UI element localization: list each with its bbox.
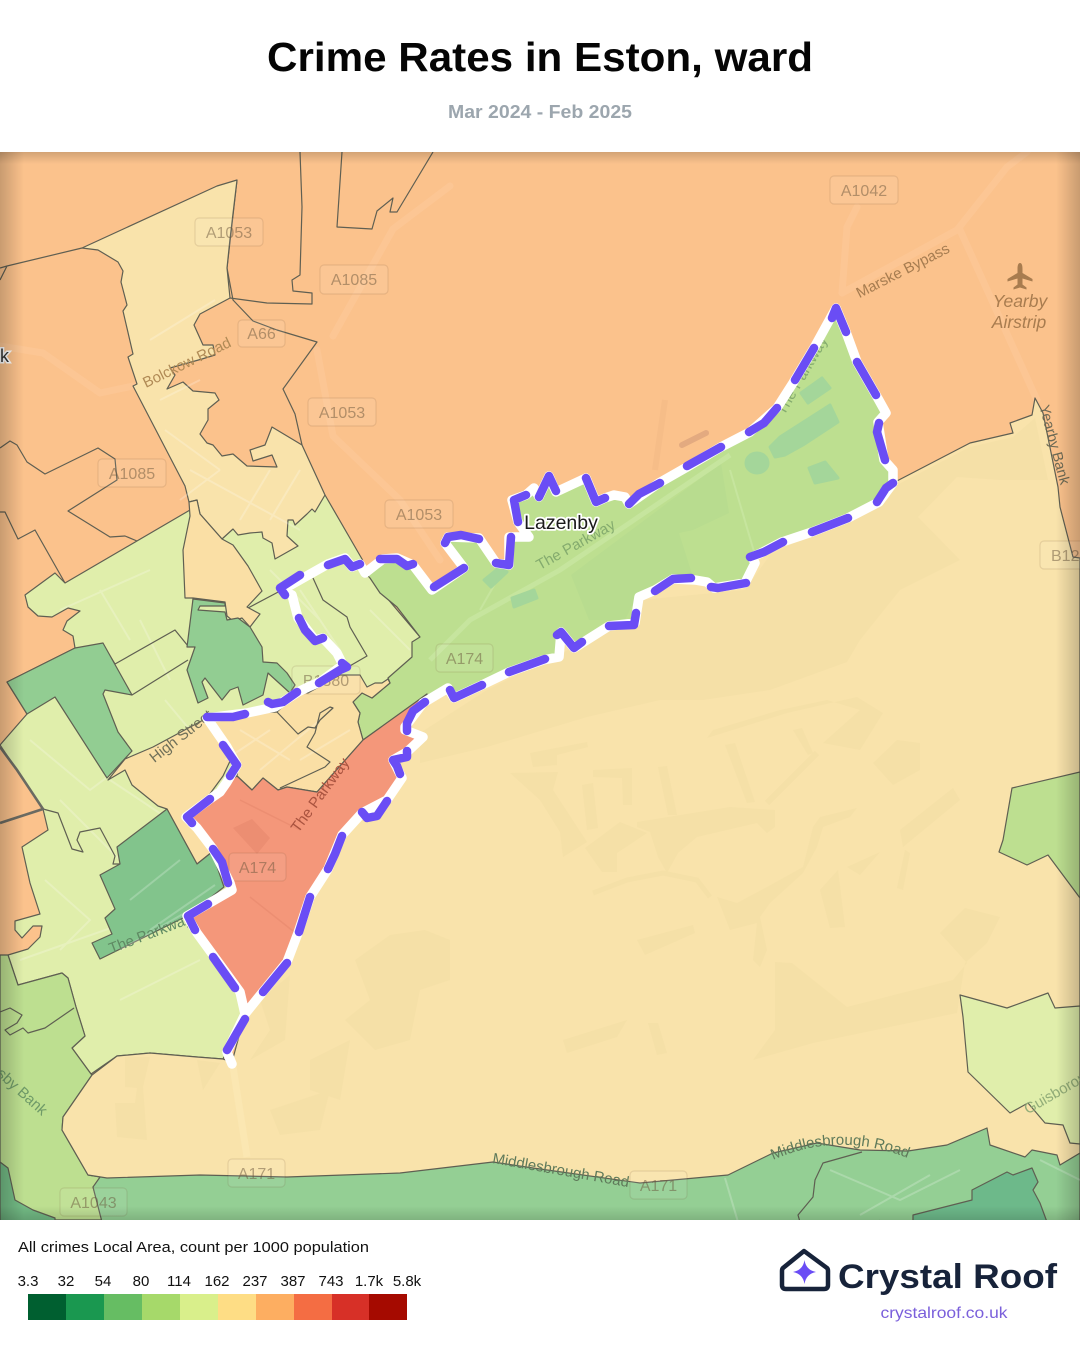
road shields: B1380	[303, 673, 349, 690]
road shields	[60, 176, 1080, 1216]
legend values: 162	[204, 1273, 230, 1290]
label: Yearby Airstrip	[991, 291, 1048, 332]
terrain: woodland shading	[115, 418, 1048, 1140]
icon: airstrip plane	[1008, 263, 1032, 290]
cell: southern darker green	[913, 1168, 1047, 1222]
cell: dark green central ward	[187, 599, 295, 705]
cell: lime western wards	[0, 495, 420, 1074]
road names: Bolckow Road	[140, 334, 234, 392]
logo: Crystal Roof	[782, 1251, 1058, 1322]
place label fragment at left edge: k	[0, 346, 10, 366]
cell: cream interior ward	[207, 675, 390, 792]
cell: cream Bolckow Road strip	[82, 180, 325, 559]
road names	[0, 246, 1080, 1187]
road shields: A1042	[841, 183, 887, 200]
brand name: Crystal Roof	[838, 1258, 1058, 1296]
label: Yearby Airstrip: Yearby	[993, 291, 1048, 311]
ward boundary: purple dashes	[187, 308, 893, 1050]
legend colour scale	[28, 1294, 407, 1320]
road names: High Street	[146, 706, 217, 766]
legend values: 1.7k	[355, 1273, 384, 1290]
legend	[18, 1239, 422, 1320]
road shields: A171	[640, 1178, 677, 1195]
legend title: All crimes Local Area, count per 1000 population	[18, 1239, 369, 1256]
road names: Yearby Bank	[1036, 403, 1072, 487]
cell: dark green The Parkway ward	[92, 809, 224, 959]
road names: The Parkway	[106, 910, 195, 957]
cell: green ward body, Eston east	[353, 308, 893, 740]
cell: cream around High Street	[108, 718, 240, 864]
road names: Middlesbrough Road	[491, 1150, 630, 1191]
legend values: 54	[95, 1273, 111, 1290]
road shields: A1085	[331, 272, 377, 289]
legend values: 237	[242, 1273, 268, 1290]
cell: red high-crime ward	[186, 694, 427, 1014]
cell: southern green band	[92, 1128, 1080, 1220]
cell: green east field	[999, 772, 1080, 898]
legend values: 32	[58, 1273, 74, 1290]
legend values: 80	[133, 1273, 149, 1290]
road shields: A1053	[396, 507, 442, 524]
road names: The Parkway	[288, 755, 353, 836]
subtitle: date range: Mar 2024 - Feb 2025	[448, 102, 632, 122]
cell: lime south-east ward	[960, 993, 1080, 1144]
legend values: 743	[318, 1273, 344, 1290]
road shields: A1085	[109, 466, 155, 483]
cell: cream tall ward	[183, 500, 262, 627]
legend values: 5.8k	[393, 1273, 422, 1290]
choropleth map	[0, 152, 1080, 1220]
road shields: A174	[239, 860, 276, 877]
road shields: A171	[238, 1166, 275, 1183]
road shields: A1053	[319, 405, 365, 422]
road names: The Parkway	[533, 516, 619, 574]
road shields: A1053	[206, 225, 252, 242]
label: Yearby Airstrip: Airstrip	[991, 312, 1046, 332]
cell: bottom-left dark green	[0, 1162, 55, 1222]
road shields: A174	[446, 651, 483, 668]
road shields: A1043	[70, 1195, 117, 1212]
place label: Lazenby: Lazenby	[524, 512, 598, 534]
legend values: 3.3	[18, 1273, 38, 1290]
website: crystalroof.co.uk	[880, 1305, 1009, 1322]
ward boundary: white casing	[186, 308, 893, 1064]
road names: The Parkway	[773, 333, 832, 418]
cell: west green	[0, 955, 107, 1220]
legend values	[18, 1273, 422, 1290]
legend values: 387	[280, 1273, 306, 1290]
title: Crime Rates in Eston, ward	[267, 34, 813, 80]
icon: house with star	[782, 1251, 828, 1289]
cell: dark green north-west	[7, 643, 132, 778]
road names: Marske Bypass	[853, 240, 953, 302]
legend values: 114	[167, 1273, 191, 1290]
park patches and fields	[430, 378, 838, 660]
road shields: A66	[247, 326, 276, 343]
cell: large cream south-east ward	[62, 398, 1080, 1183]
road names: Middlesbrough Road	[770, 1134, 910, 1160]
